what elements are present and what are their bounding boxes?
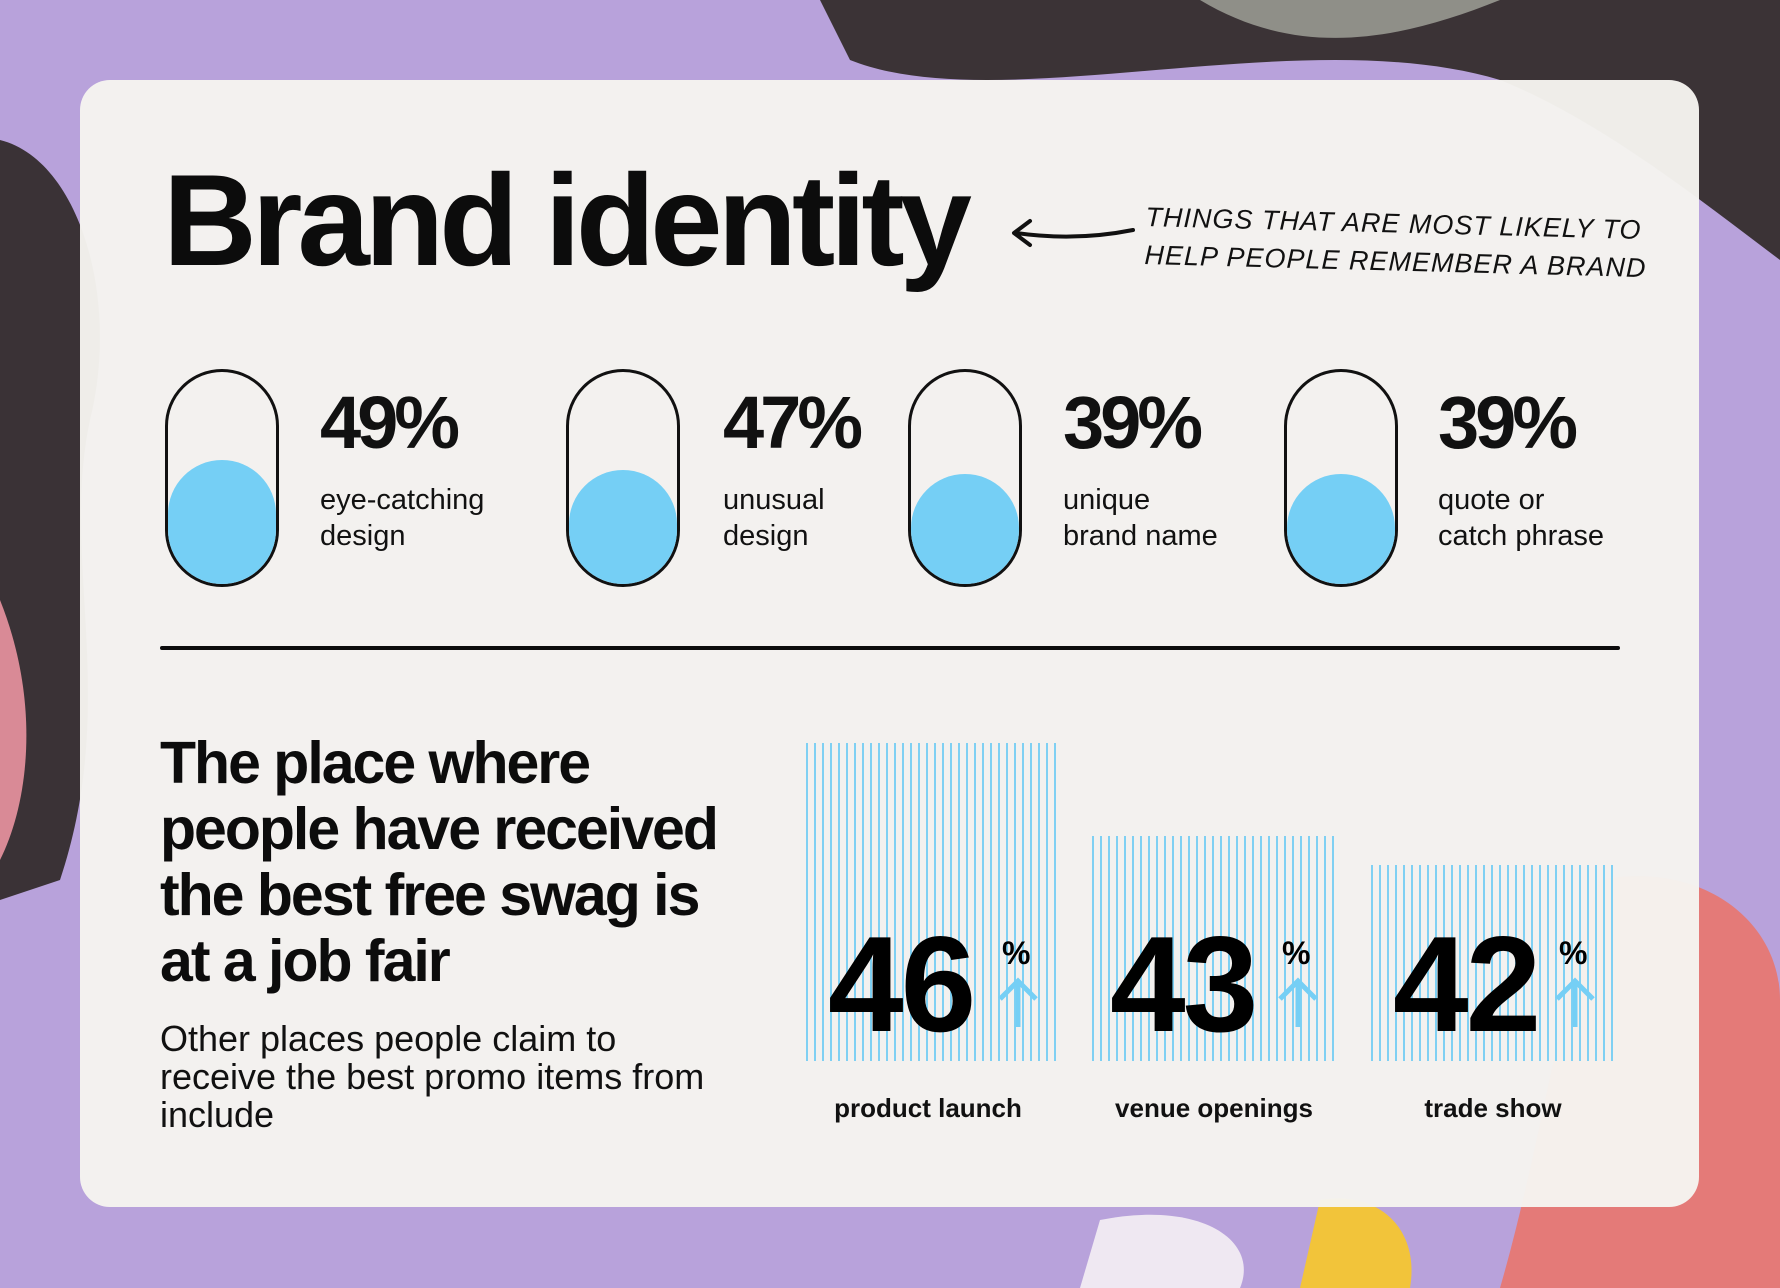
subtext: [160, 1018, 704, 1135]
chart: trade show 42%: %: [1559, 935, 1587, 971]
icon: up arrow: [1278, 978, 1318, 1027]
heading: best free swag: at a job fair: [160, 928, 449, 994]
label: brand name: [1063, 520, 1218, 552]
label: unique: [1063, 484, 1150, 516]
value: 42: [1393, 908, 1538, 1060]
label: [320, 484, 484, 552]
icon: up arrow: [998, 978, 1038, 1027]
icon: up arrow: [1556, 978, 1595, 1027]
icon: pill gauge 39: [908, 369, 1022, 587]
title: Brand identity: [163, 147, 967, 293]
bar: [1371, 865, 1613, 1061]
stat: 47% unusual design: [566, 369, 862, 587]
arrow: pointing to title: [1012, 218, 1135, 248]
value: 49%: [320, 381, 456, 464]
handwritten note: [1144, 202, 1647, 283]
label: design: [723, 520, 808, 552]
label: [1063, 484, 1218, 552]
label: [1438, 484, 1604, 552]
bar: [806, 743, 1058, 1061]
card: [80, 80, 1699, 1207]
label: quote or: [1438, 484, 1544, 516]
label: eye-catching: [320, 484, 484, 516]
chart: venue openings 43%: %: [1282, 935, 1310, 971]
stat: 49% eye-catching design: [165, 369, 484, 587]
heading: best free swag: [160, 730, 717, 994]
label: venue openings: [1115, 1093, 1313, 1123]
heading: best free swag: people have received: [160, 796, 717, 862]
value: 39%: [1438, 381, 1574, 464]
chart: venue openings 43%: [1092, 836, 1334, 1123]
handwritten note: THINGS THAT ARE MOST LIKELY TO: [1145, 202, 1642, 245]
stat: 39% unique brand name: [908, 369, 1218, 587]
chart: product launch 46%: [806, 743, 1056, 1123]
label: unusual: [723, 484, 825, 516]
value: 46: [828, 908, 973, 1060]
bar: [1092, 836, 1334, 1061]
chart: trade show 42%: [1371, 865, 1613, 1123]
subtext: receive the best promo items from: [160, 1056, 704, 1097]
heading: best free swag: the best free swag is: [160, 862, 698, 928]
icon: pill gauge 47: [566, 369, 680, 587]
icon: pill gauge 49: [165, 369, 279, 587]
subtext: Other places people claim to: [160, 1018, 616, 1059]
icon: pill gauge 39: [1284, 369, 1398, 587]
handwritten note: HELP PEOPLE REMEMBER A BRAND: [1144, 240, 1647, 283]
label: product launch: [834, 1093, 1022, 1123]
chart: product launch 46%: %: [1002, 935, 1030, 971]
value: 47%: [723, 381, 859, 464]
value: 39%: [1063, 381, 1199, 464]
value: 43: [1110, 908, 1255, 1060]
heading: best free swag: The place where: [160, 730, 589, 796]
label: design: [320, 520, 405, 552]
label: trade show: [1424, 1093, 1562, 1123]
subtext: include: [160, 1094, 274, 1135]
label: [723, 484, 825, 552]
label: catch phrase: [1438, 520, 1604, 552]
stat: 39% quote or catch phrase: [1284, 369, 1604, 587]
